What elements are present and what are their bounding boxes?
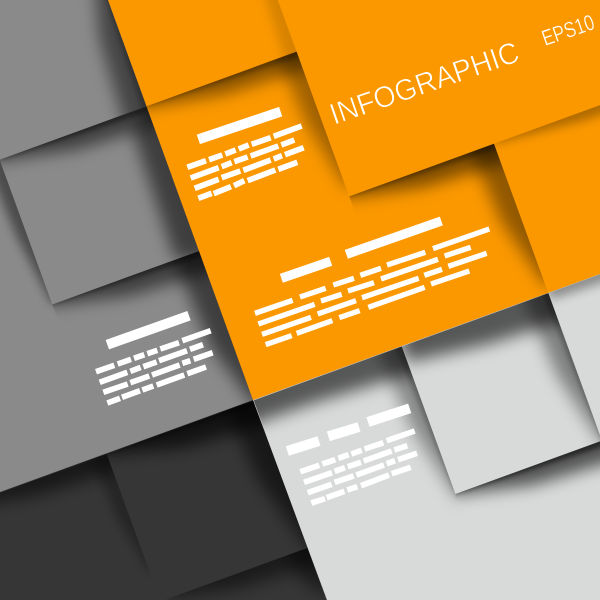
text block: central orange placeholder lines xyxy=(255,221,489,345)
text block: upper orange placeholder lines xyxy=(187,112,304,198)
panel: orange quadrant xyxy=(89,0,600,400)
title: INFOGRAPHIC: INFOGRAPHIC xyxy=(326,36,523,132)
text block: grey placeholder lines xyxy=(96,316,213,403)
panel: light quadrant xyxy=(253,274,600,600)
panel: dark quadrant xyxy=(0,400,327,600)
text block: light grey placeholder lines xyxy=(287,408,417,503)
panel: grey quadrant xyxy=(0,0,253,404)
